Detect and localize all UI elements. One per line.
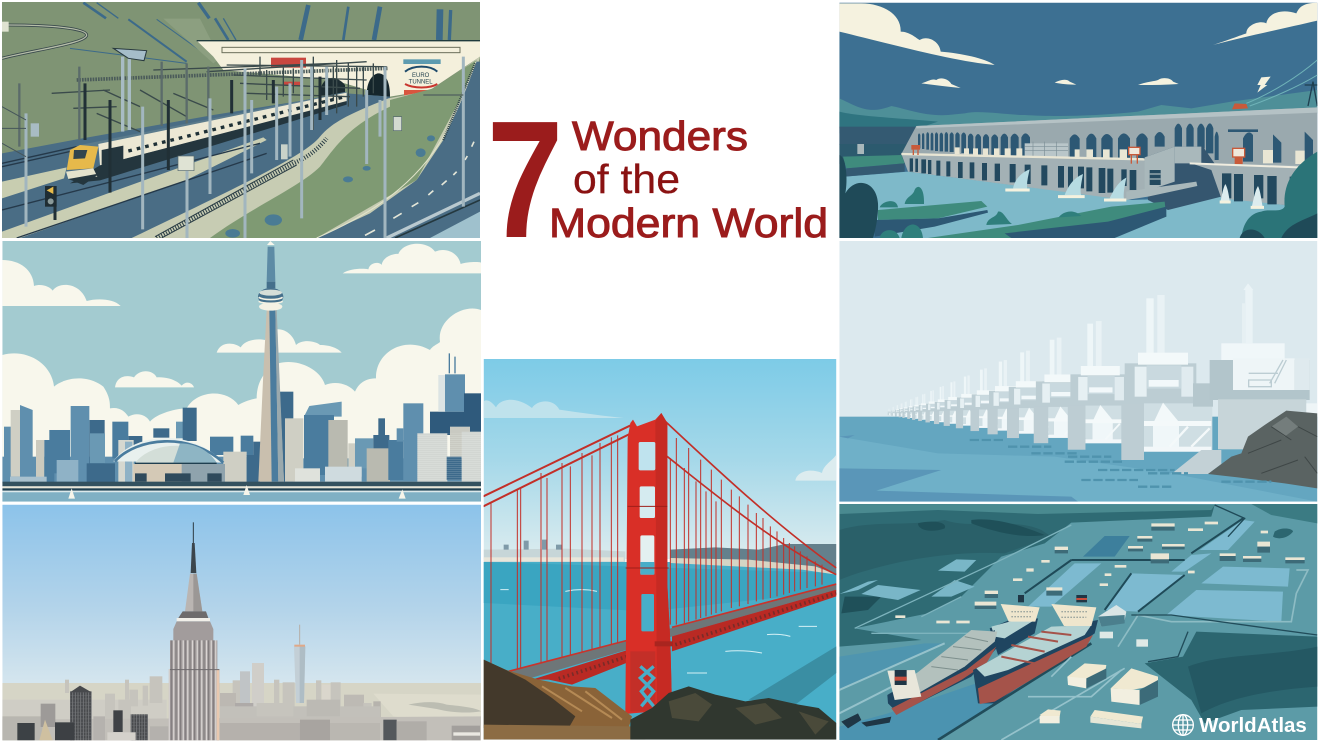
clouds [484, 400, 836, 481]
Empire State Building [169, 522, 219, 740]
WorldAtlas logo [1173, 715, 1193, 735]
canal water [839, 643, 1091, 740]
One World Trade Center [294, 625, 305, 703]
clouds [2, 244, 481, 490]
clouds [839, 3, 1317, 93]
lock chambers and basins [1028, 520, 1290, 622]
downtown buildings left [2, 405, 261, 485]
dam lower face with sluice slots [901, 147, 1305, 200]
panel: Delta Works storm surge barrier illustration [839, 241, 1318, 502]
tunnel portal: EURO [412, 73, 430, 79]
CN Tower [258, 241, 284, 482]
bay water [484, 562, 836, 740]
title line: of the: of the [573, 156, 680, 202]
foreground city blocks [2, 686, 481, 740]
logo wordmark: WorldAtlas [1199, 714, 1307, 737]
title line: Wonders: Wonders [572, 113, 748, 159]
sloping green hill and path [132, 57, 480, 238]
panel: Channel Tunnel illustration [2, 2, 480, 238]
distant midtown and downtown towers [65, 663, 381, 718]
nearest pier and abutment [1171, 283, 1318, 474]
title line: Modern World: Modern World [549, 200, 828, 246]
suspension cables [483, 420, 836, 671]
forest areas [839, 504, 1317, 723]
overhead line gantries and poles [2, 57, 463, 238]
tunnel portal [197, 41, 480, 99]
left cargo ship [887, 630, 998, 715]
ponds [839, 559, 976, 600]
Rogers Centre dome [113, 438, 225, 485]
large cream warehouses [1040, 605, 1158, 728]
tunnel portal: TUNNEL [409, 79, 433, 85]
platforms [2, 167, 67, 198]
panel: Itaipu Dam illustration [839, 3, 1317, 238]
central powerhouse block and right sluices [1126, 147, 1317, 210]
lamp, signal and trackside boxes [31, 48, 402, 207]
right cargo ship [973, 620, 1098, 704]
railway track [155, 138, 327, 238]
receding barrier piers [888, 295, 1212, 460]
sea water [839, 417, 1317, 502]
dam upper face with arches [901, 107, 1317, 167]
middle cargo ship [990, 618, 1038, 655]
panel: Empire State Building and New York skyline illustration [2, 505, 481, 740]
buildings right of tower [278, 353, 481, 482]
title: 7 Wonders of the Modern World [487, 87, 828, 273]
rock armour [1208, 411, 1317, 488]
waterfront and lake [2, 482, 481, 502]
numeral 7: 7 [487, 87, 563, 273]
spillway jets [1005, 169, 1264, 207]
bushes [225, 135, 435, 238]
ship superstructures [1001, 595, 1096, 626]
lockside buildings [895, 522, 1305, 623]
hazy land and harbour [2, 683, 481, 740]
Marin headlands and shrubs [484, 660, 836, 740]
hills and power lines [839, 60, 1317, 164]
Eurostar train [66, 92, 347, 185]
reservoir water [845, 172, 1317, 238]
water ripples [970, 440, 1271, 487]
distant city and headlands [484, 540, 836, 575]
tugboats [841, 713, 891, 728]
south tower [625, 413, 673, 714]
panel: Panama Canal illustration [839, 504, 1317, 740]
green banks and trees [839, 152, 1317, 238]
fields with blue stripes [2, 3, 451, 63]
panel: CN Tower and Toronto skyline illustration [2, 241, 481, 502]
lock walls and access roads [839, 505, 1317, 740]
panel: Golden Gate Bridge illustration [483, 359, 836, 740]
left riverbank [843, 144, 905, 177]
orange gate cranes [911, 145, 1245, 167]
roadway deck and truss [509, 584, 836, 685]
